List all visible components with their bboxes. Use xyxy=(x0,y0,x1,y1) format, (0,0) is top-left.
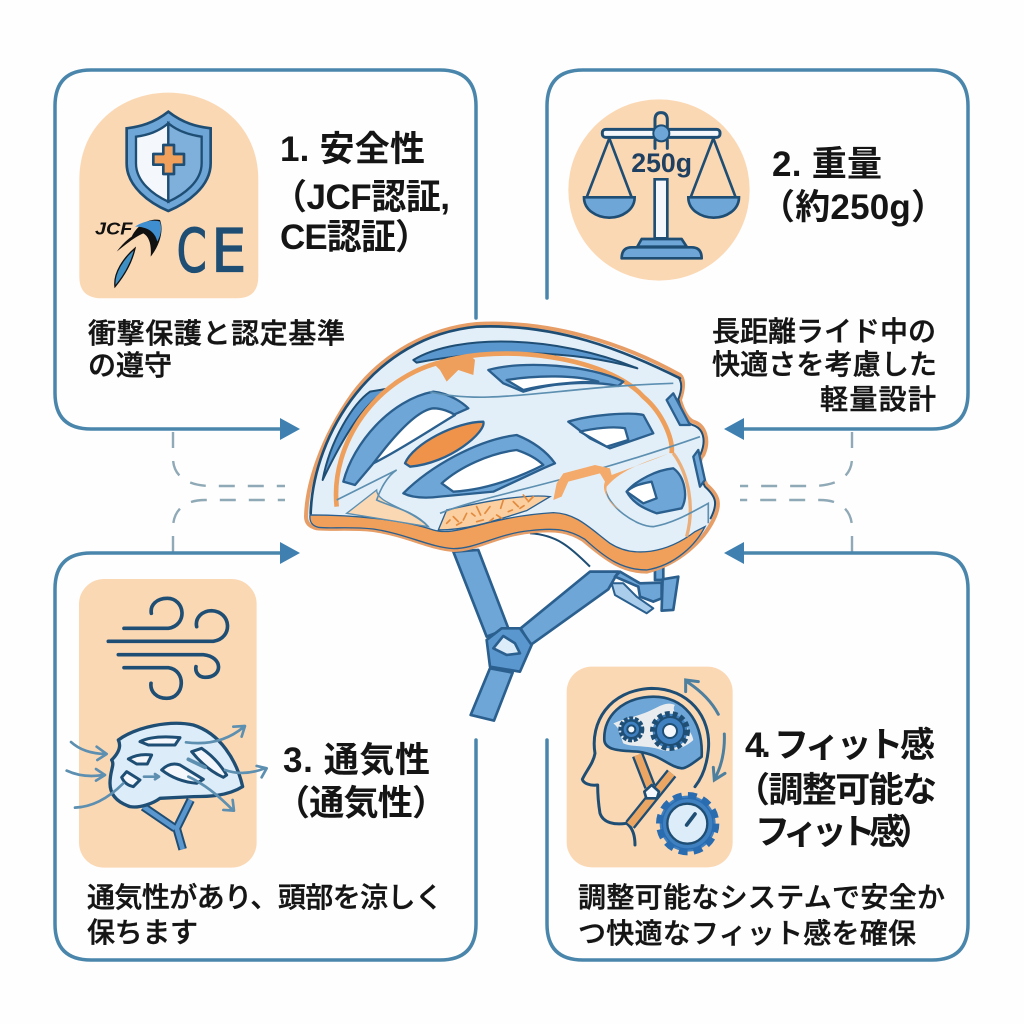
helmet shell xyxy=(306,324,718,572)
heading: ventilation: （通気性） xyxy=(275,784,447,823)
heading: fit xyxy=(735,726,937,852)
rim: orange band xyxy=(310,513,705,570)
heading: weight: （約250g） xyxy=(760,188,946,227)
rear lower pad xyxy=(347,490,428,527)
helmet straps and buckle xyxy=(453,533,678,721)
panel: fit xyxy=(547,542,968,960)
rear outline xyxy=(678,377,715,518)
text: safety description xyxy=(88,318,345,381)
heading: safety: （JCF認証, xyxy=(272,178,450,217)
shell panel lines xyxy=(337,383,708,527)
heading: fit: 4. フィット感 xyxy=(745,726,935,765)
text: weight description: 軽量設計 xyxy=(820,384,936,415)
small helmet strap xyxy=(143,800,191,849)
arrow: ventilation to helmet xyxy=(280,542,300,564)
decorative dashed connectors xyxy=(173,432,852,552)
text: weight description: 快適さを考慮した xyxy=(712,349,937,380)
ventilation openings xyxy=(343,365,705,513)
heading: ventilation xyxy=(275,741,447,823)
heading: weight xyxy=(760,145,946,227)
heading: safety: 1. 安全性 xyxy=(280,130,425,169)
text: weight description: 長距離ライド中の xyxy=(712,316,936,347)
foam pad texture xyxy=(438,496,550,530)
arrow: safety to helmet xyxy=(280,418,300,440)
icon: shield and certification marks: JCF xyxy=(95,219,133,239)
small helmet shell xyxy=(110,723,243,807)
orange inner frame xyxy=(336,354,672,507)
icon: shield and certification marks: C xyxy=(177,217,207,287)
heading: safety xyxy=(272,130,450,257)
icon: shield and certification marks: E xyxy=(211,215,246,286)
text: fit description xyxy=(578,882,945,949)
panel: safety xyxy=(55,70,476,440)
text: fit description: 調整可能なシステムで安全か xyxy=(578,882,945,913)
icon: wind and airflow helmet xyxy=(67,579,267,868)
arrow: fit to helmet xyxy=(724,542,744,564)
text: safety description: 衝撃保護と認定基準 xyxy=(88,318,345,349)
central helmet illustration xyxy=(306,324,718,721)
panel: weight xyxy=(547,70,968,440)
heading: fit: フィット感） xyxy=(755,813,933,852)
heading: weight: 2. 重量 xyxy=(772,145,882,184)
top rib outline xyxy=(311,326,680,513)
heading: safety: CE認証） xyxy=(280,218,430,257)
heading: ventilation: 3. 通気性 xyxy=(283,741,430,780)
icon: shield and certification marks xyxy=(79,93,258,298)
icon: balance scale: 250g xyxy=(631,148,692,178)
text: safety description: の遵守 xyxy=(88,350,172,381)
icon: head with adjustable helmet xyxy=(567,667,733,867)
text: ventilation description xyxy=(87,882,443,948)
text: weight description xyxy=(712,316,937,415)
panel: ventilation xyxy=(55,542,476,960)
text: fit description: つ快適なフィット感を確保 xyxy=(578,918,916,949)
icon: balance scale xyxy=(568,99,750,281)
text: ventilation description: 保ちます xyxy=(87,917,198,948)
arrow: weight to helmet xyxy=(724,418,744,440)
text: ventilation description: 通気性があり、頭部を涼しく xyxy=(87,882,443,913)
side orange accent xyxy=(553,452,673,510)
heading: fit: （調整可能な xyxy=(735,771,937,810)
